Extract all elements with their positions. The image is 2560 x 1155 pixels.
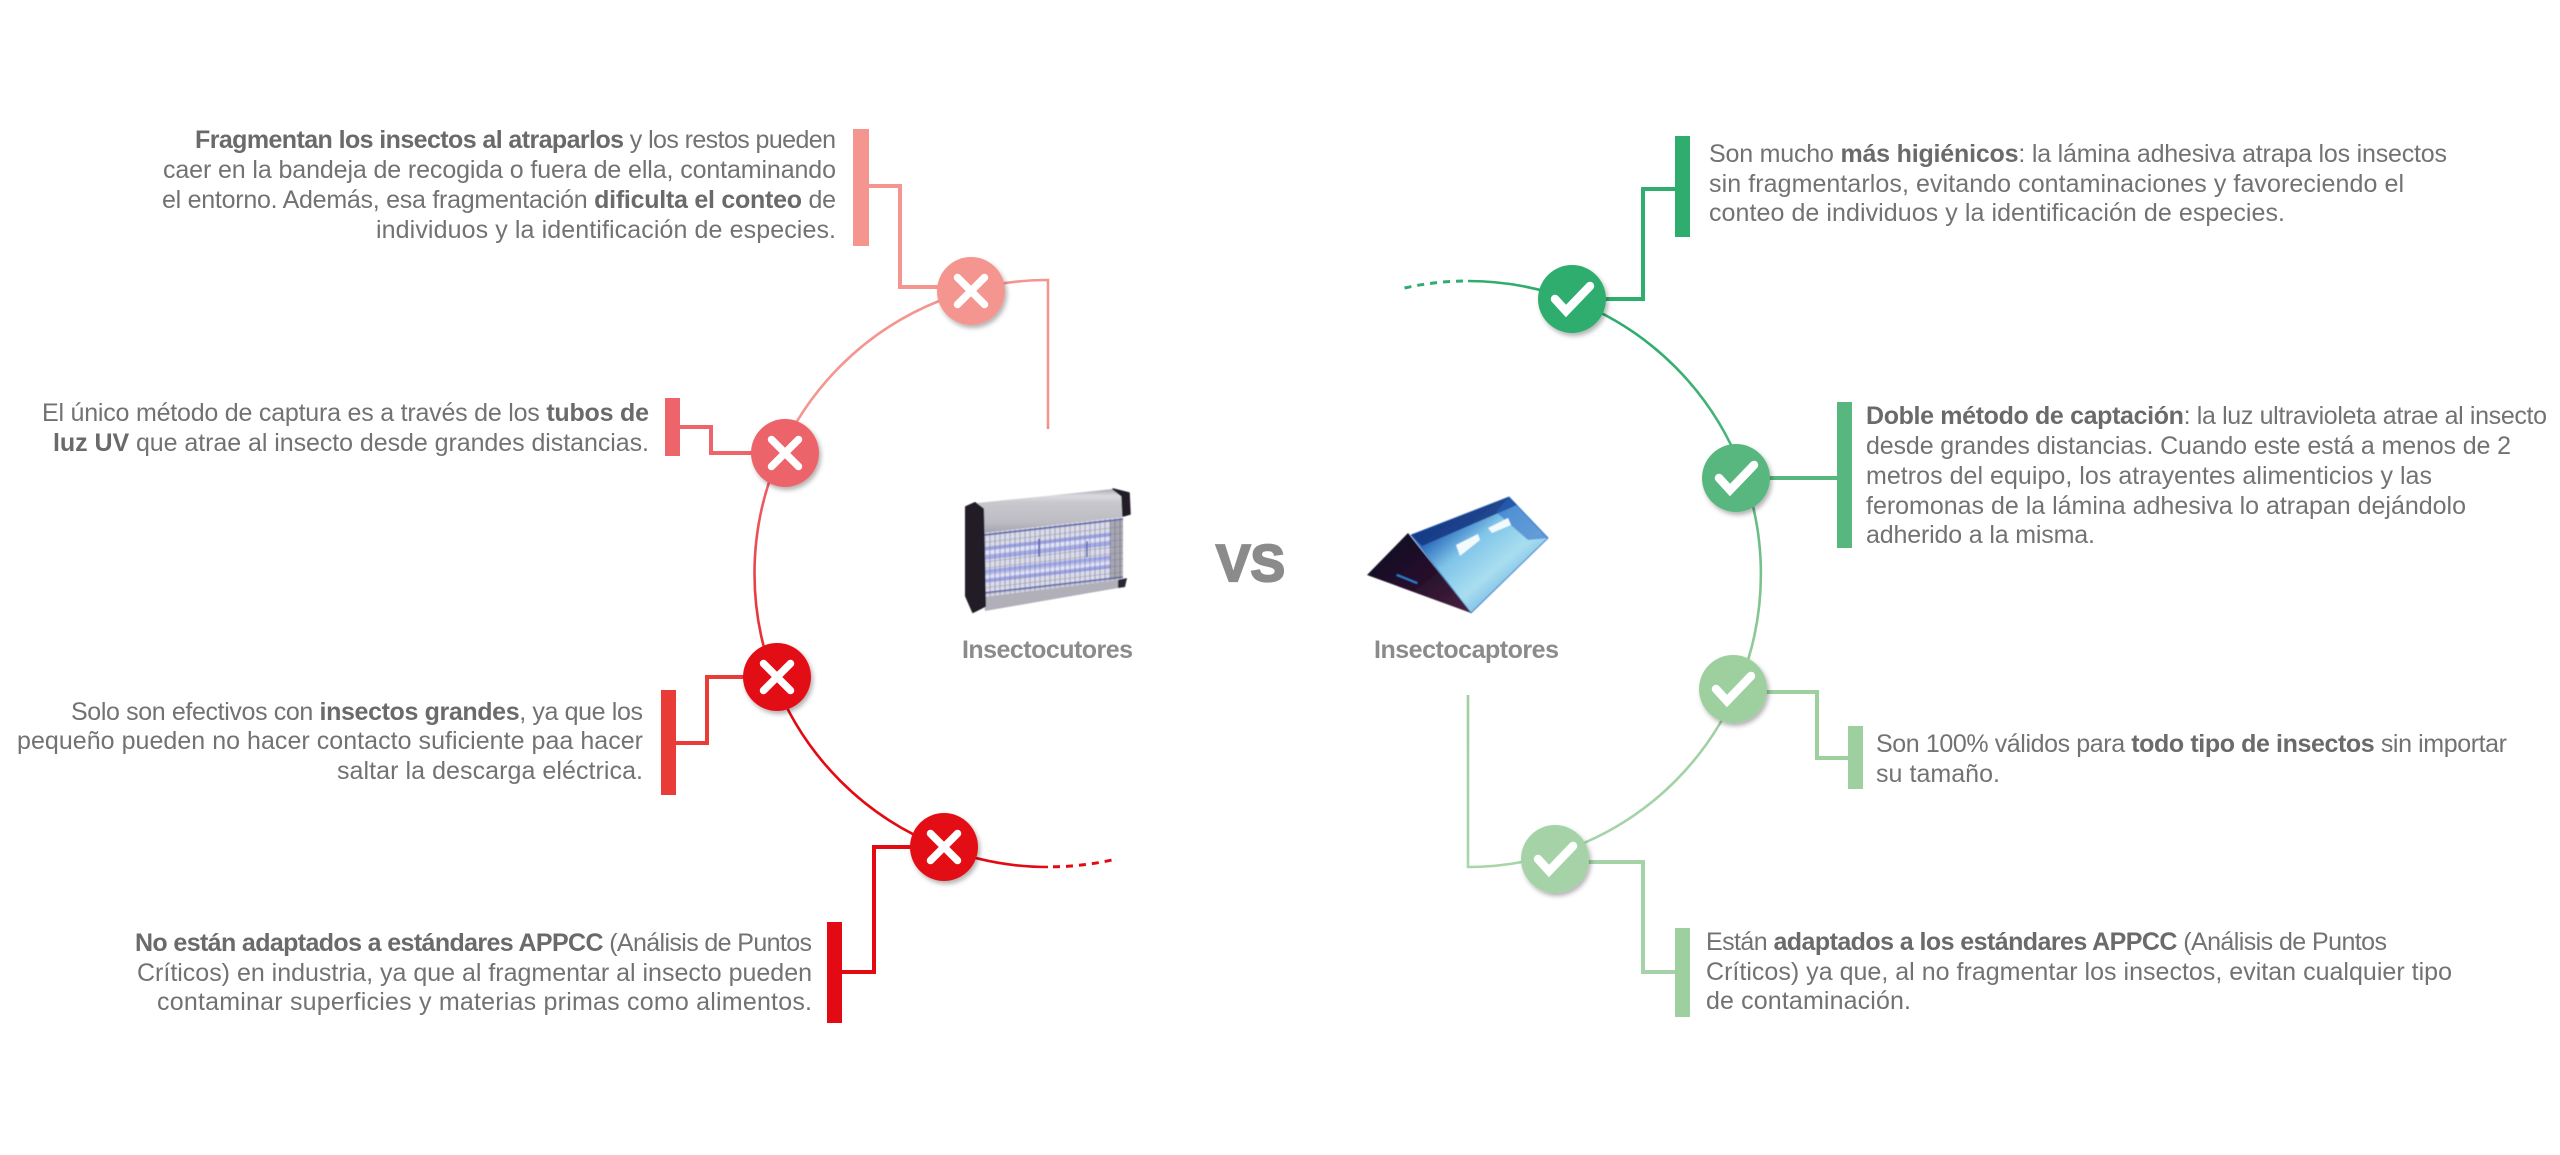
text: estándares: Críticos) ya que, al no fragmentar los insectos, evitan cualquier tipo xyxy=(1706,958,2452,986)
bar 1 xyxy=(853,129,869,246)
bar 1 xyxy=(1675,136,1690,237)
text: insectos grandes: Solo son efectivos con insectos grandes, ya que los xyxy=(71,698,643,726)
connector 4 xyxy=(1584,862,1675,972)
text: todo tipo xyxy=(1876,730,2507,788)
text: higiénicos: conteo de individuos y la identificación de especies. xyxy=(1709,199,2285,227)
icon: cross 2 xyxy=(751,419,819,487)
panel: insectocutores (left) xyxy=(17,126,1117,1023)
text: APPCC xyxy=(135,929,812,1016)
text: fragmentan xyxy=(162,126,836,244)
bar 4 xyxy=(827,922,842,1023)
text: higiénicos: Son mucho más higiénicos: la lámina adhesiva atrapa los insectos xyxy=(1709,140,2447,168)
text: doble método xyxy=(1866,402,2547,549)
bar 3 xyxy=(1848,726,1863,789)
text: doble método: Doble método de captación: la luz ultravioleta atrae al insecto xyxy=(1866,402,2547,430)
text: APPCC: Críticos) en industria, ya que al fragmentar al insecto pueden xyxy=(137,959,812,987)
connector 1 xyxy=(869,186,940,287)
icon: check 4 xyxy=(1521,825,1589,893)
icon: cross 4 xyxy=(910,813,978,881)
text: doble método: metros del equipo, los atrayentes alimenticios y las xyxy=(1866,462,2432,490)
connector 3 xyxy=(1762,692,1848,758)
panel: insectocaptores (right) xyxy=(1401,136,2547,1017)
bar 2 xyxy=(1837,402,1852,548)
ring: left timeline arc xyxy=(754,280,1117,867)
icon: check 1 xyxy=(1538,265,1606,333)
connector 2 xyxy=(1765,476,1837,480)
text: tubos UV xyxy=(42,399,649,457)
connector 2 xyxy=(680,427,755,453)
text: doble método: adherido a la misma. xyxy=(1866,521,2095,549)
ring: right timeline arc xyxy=(1401,281,1761,867)
text: todo tipo: Son 100% válidos para todo tipo de insectos sin importar xyxy=(1876,730,2507,758)
connector 1 xyxy=(1600,189,1675,299)
icon: check 3 xyxy=(1699,655,1767,723)
text: doble método: feromonas de la lámina adhesiva lo atrapan dejándolo xyxy=(1866,492,2466,520)
bar 3 xyxy=(661,690,676,795)
product: insectocaptor device xyxy=(1367,497,1548,613)
text: insectos grandes: pequeño pueden no hacer contacto suficiente paa hacer xyxy=(17,727,643,755)
text: estándares xyxy=(1706,928,2452,1015)
text: insectos grandes xyxy=(17,698,643,785)
text: tubos UV: El único método de captura es a través de los tubos de xyxy=(42,399,649,427)
connector 3 xyxy=(676,677,750,743)
label: insectocaptores: Insectocaptores xyxy=(1374,636,1559,664)
bar 4 xyxy=(1675,928,1690,1017)
icon: check 2 xyxy=(1702,444,1770,512)
icon: cross 3 xyxy=(743,643,811,711)
product: insectocutor device xyxy=(966,489,1130,612)
label: vs: VS xyxy=(1216,535,1285,593)
text: APPCC: No están adaptados a estándares APPCC (Análisis de Puntos xyxy=(135,929,812,957)
text: fragmentan: el entorno. Además, esa fragmentación dificulta el conteo de xyxy=(162,186,836,214)
text: fragmentan: Fragmentan los insectos al atraparlos y los restos pueden xyxy=(195,126,836,154)
text: fragmentan: individuos y la identificación de especies. xyxy=(376,216,836,244)
text: estándares: Están adaptados a los estándares APPCC (Análisis de Puntos xyxy=(1706,928,2387,956)
text: insectos grandes: saltar la descarga eléctrica. xyxy=(337,757,643,785)
label: insectocutores: Insectocutores xyxy=(962,636,1133,664)
text: doble método: desde grandes distancias. Cuando este está a menos de 2 xyxy=(1866,432,2511,460)
text: higiénicos xyxy=(1709,140,2447,227)
text: estándares: de contaminación. xyxy=(1706,987,1911,1015)
icon: cross 1 xyxy=(937,257,1005,325)
text: todo tipo: su tamaño. xyxy=(1876,760,2000,788)
text: tubos UV: luz UV que atrae al insecto desde grandes distancias. xyxy=(53,429,649,457)
text: fragmentan: caer en la bandeja de recogida o fuera de ella, contaminando xyxy=(163,156,836,184)
bar 2 xyxy=(665,398,680,456)
text: higiénicos: sin fragmentarlos, evitando contaminaciones y favoreciendo el xyxy=(1709,170,2404,198)
text: APPCC: contaminar superficies y materias primas como alimentos. xyxy=(157,988,812,1016)
connector 4 xyxy=(842,847,915,972)
